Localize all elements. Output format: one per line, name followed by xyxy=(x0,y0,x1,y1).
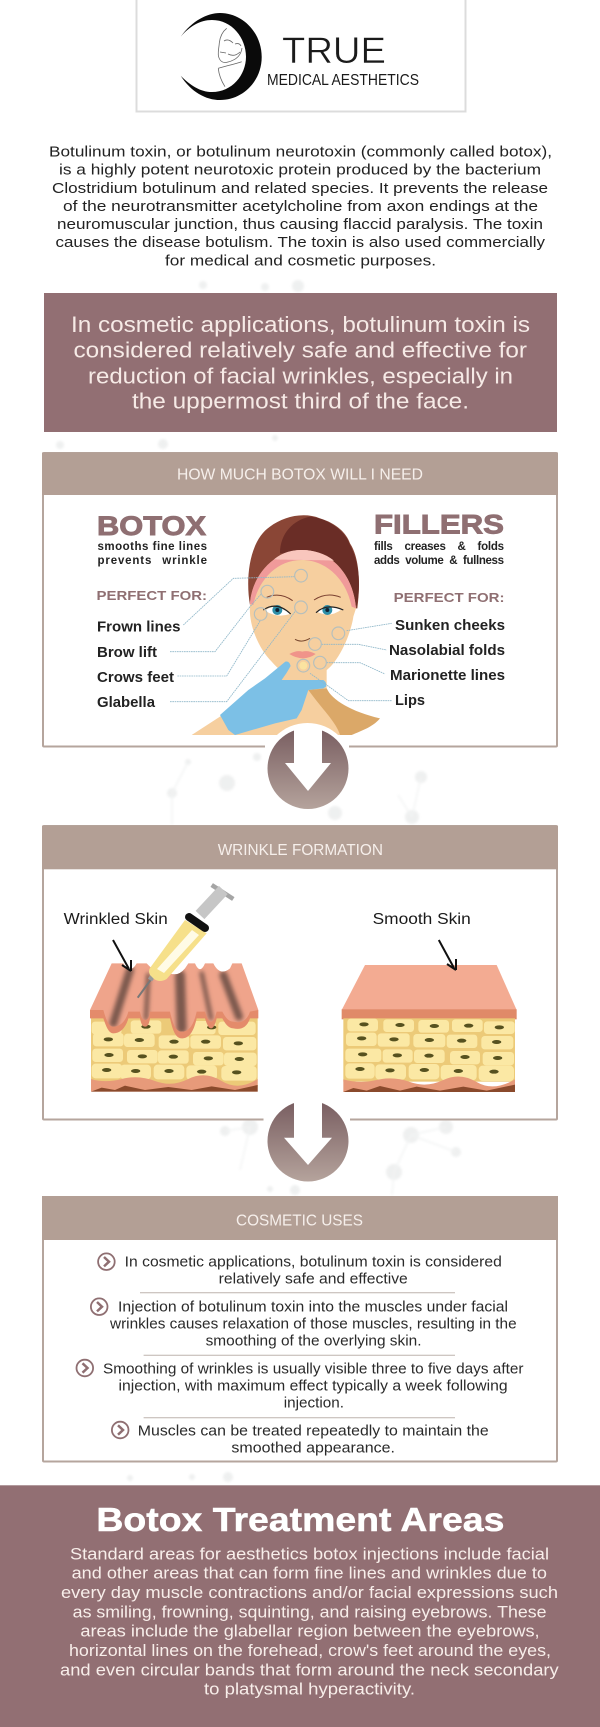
list dividers xyxy=(140,1293,455,1418)
botox heading: prevents wrinkle xyxy=(98,555,207,567)
section paragraph: areas include the glabellar region between the eyebrows, xyxy=(80,1623,540,1641)
section paragraph: as smiling, frowning, squinting, and raising eyebrows. These xyxy=(73,1603,546,1621)
botox heading: BOTOX xyxy=(97,511,206,541)
intro paragraph: Clostridium botulinum and related species. It prevents the release xyxy=(52,180,548,197)
icon: chevron bullets xyxy=(76,1253,128,1438)
list item 1: relatively safe and effective xyxy=(219,1272,408,1288)
list item 4: Muscles can be treated repeatedly to maintain the xyxy=(138,1423,489,1439)
section paragraph: and other areas that can form fine lines and wrinkles due to xyxy=(72,1565,547,1583)
logo crescent xyxy=(181,13,262,100)
list item 3: injection, with maximum effect typically a week following xyxy=(118,1379,508,1395)
list item 2: wrinkles causes relaxation of those muscles, resulting in the xyxy=(109,1317,517,1333)
illustration: face with injection points xyxy=(170,515,392,735)
section paragraph xyxy=(60,1545,560,1698)
illustration: syringe xyxy=(138,885,233,998)
logo panel xyxy=(136,0,466,112)
callout: cosmetic applications: reduction of facial wrinkles, especially in xyxy=(88,363,513,388)
logo face sketch xyxy=(218,28,242,87)
list item 2 xyxy=(109,1300,517,1350)
fillers heading: adds volume & fullness xyxy=(374,555,504,567)
panel: botox treatment areas xyxy=(0,1485,600,1727)
botox heading: smooths fine lines xyxy=(98,541,207,553)
fillers heading: FILLERS xyxy=(374,509,504,539)
botox area labels: Glabella xyxy=(97,695,156,711)
panel: cosmetic uses xyxy=(42,1196,558,1462)
intro paragraph: for medical and cosmetic purposes. xyxy=(165,252,436,269)
filler area labels: Sunken cheeks xyxy=(395,618,505,634)
section paragraph: Standard areas for aesthetics botox injections include facial xyxy=(70,1545,549,1563)
list item 3 xyxy=(103,1362,524,1412)
callout: cosmetic applications xyxy=(44,293,557,432)
panel: wrinkle formation xyxy=(42,826,558,1120)
list item 4 xyxy=(138,1423,489,1456)
label: wrinkled skin: Wrinkled Skin xyxy=(64,911,168,928)
fillers heading xyxy=(374,509,504,605)
botox area labels: Brow lift xyxy=(97,645,157,661)
arrow: to smooth skin xyxy=(439,940,456,970)
filler area labels xyxy=(389,618,505,709)
intro paragraph: causes the disease botulism. The toxin is also used commercially xyxy=(56,234,546,251)
background molecule pattern xyxy=(56,280,461,1482)
list item 4: smoothed appearance. xyxy=(231,1440,395,1456)
filler area labels: Nasolabial folds xyxy=(389,643,505,659)
intro paragraph: neuromuscular junction, thus causing flaccid paralysis. The toxin xyxy=(57,216,543,233)
list item 2: Injection of botulinum toxin into the muscles under facial xyxy=(118,1300,508,1316)
list item 1 xyxy=(125,1255,502,1288)
intro paragraph: Botulinum toxin, or botulinum neurotoxin (commonly called botox), xyxy=(49,144,552,161)
botox area labels xyxy=(97,620,180,711)
intro paragraph xyxy=(49,144,552,269)
list item 1: In cosmetic applications, botulinum toxin is considered xyxy=(125,1255,502,1271)
botox area labels: Crows feet xyxy=(97,670,174,686)
list item 2: smoothing of the overlying skin. xyxy=(206,1334,422,1350)
logo wordmark: MEDICAL AESTHETICS xyxy=(267,72,419,89)
panel heading xyxy=(42,826,558,869)
botox heading: PERFECT FOR: xyxy=(96,589,207,603)
fillers heading: PERFECT FOR: xyxy=(394,591,504,605)
label: smooth skin: Smooth Skin xyxy=(373,911,471,928)
filler area labels: Lips xyxy=(395,693,425,709)
botox heading xyxy=(96,511,207,603)
logo wordmark: TRUE xyxy=(282,30,386,71)
intro paragraph: of the neurotransmitter acetylcholine from axon endings at the xyxy=(63,198,538,215)
filler area labels: Marionette lines xyxy=(390,668,505,684)
section paragraph: to platysmal hyperactivity. xyxy=(204,1680,415,1698)
section paragraph: horizontal lines on the forehead, crow's feet around the eyes, xyxy=(69,1642,551,1660)
callout: cosmetic applications: considered relatively safe and effective for xyxy=(74,338,528,363)
section paragraph: and even circular bands that form around the neck secondary xyxy=(60,1661,560,1679)
list item 3: Smoothing of wrinkles is usually visible three to five days after xyxy=(103,1362,524,1378)
section title: Botox Treatment Areas xyxy=(96,1502,504,1539)
callout: cosmetic applications: In cosmetic applications, botulinum toxin is xyxy=(71,312,530,337)
logo wordmark xyxy=(267,30,419,89)
fillers heading: fills creases & folds xyxy=(374,541,504,553)
panel heading: WRINKLE FORMATION xyxy=(218,842,383,859)
illustration: wrinkled skin block xyxy=(90,963,258,1092)
panel heading: HOW MUCH BOTOX WILL I NEED xyxy=(177,466,423,483)
arrow: to wrinkled skin xyxy=(113,940,131,971)
illustration: smooth skin block xyxy=(342,965,517,1092)
arrow: down 2 xyxy=(262,1096,352,1186)
panel heading: COSMETIC USES xyxy=(236,1213,363,1230)
arrow: down 1 xyxy=(262,723,352,813)
list item 3: injection. xyxy=(284,1396,344,1412)
panel: how much botox xyxy=(42,452,558,746)
intro paragraph: is a highly potent neurotoxic protein produced by the bacterium xyxy=(59,162,541,179)
botox area labels: Frown lines xyxy=(97,620,180,636)
panel heading xyxy=(42,1196,558,1240)
section paragraph: every day muscle contractions and/or facial expressions such xyxy=(61,1584,558,1602)
panel heading xyxy=(42,452,558,495)
callout: cosmetic applications: the uppermost third of the face. xyxy=(132,389,469,414)
